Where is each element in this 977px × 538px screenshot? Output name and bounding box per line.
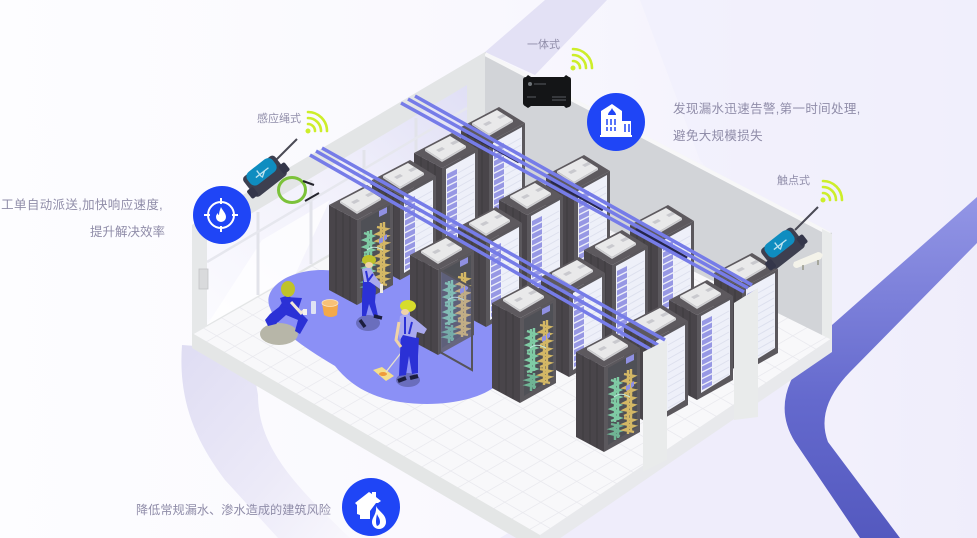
sensor: rope type	[238, 139, 319, 202]
green sensing rope	[278, 178, 319, 202]
icon: building with flame	[587, 93, 645, 151]
sensor: contact type	[756, 207, 823, 273]
background band: right blue	[785, 197, 977, 538]
right wall	[485, 52, 832, 345]
label: contact type: 触点式	[777, 173, 810, 187]
background facet: upper right	[640, 0, 977, 325]
worker: standing	[356, 255, 383, 331]
floor edge: front left	[192, 333, 540, 538]
text: dispatch: 工单自动派送,加快响应速度,	[1, 197, 163, 212]
left glass wall	[192, 52, 485, 338]
text: alert line 2: 避免大规模损失	[673, 128, 763, 143]
bottle	[311, 301, 316, 314]
background band: lower left	[181, 345, 350, 538]
open rack door	[440, 270, 472, 370]
background facet: lower right	[500, 370, 860, 538]
bucket	[322, 300, 338, 317]
water puddle	[268, 270, 510, 404]
background band: top	[485, 0, 607, 75]
label: rope type: 感应绳式	[257, 111, 301, 125]
front pillars	[643, 288, 758, 472]
icon: house with flame	[342, 478, 400, 536]
device: integrated	[523, 75, 571, 108]
wifi: contact type	[821, 181, 842, 202]
label: integrated: 一体式	[527, 37, 560, 51]
wall switch	[199, 269, 208, 289]
wifi: integrated	[571, 49, 592, 70]
text: risk: 降低常规漏水、渗水造成的建筑风险	[136, 502, 331, 517]
server racks	[329, 107, 778, 452]
worker: mopping	[373, 300, 427, 387]
overhead cable trays: front	[310, 148, 665, 349]
text: dispatch line 2: 提升解决效率	[90, 224, 165, 239]
tiled floor	[192, 168, 832, 538]
worker: kneeling	[260, 281, 308, 345]
icon: target with flame	[193, 186, 251, 244]
overhead cable trays: back	[401, 96, 752, 292]
wifi: rope type	[306, 112, 327, 133]
white contact sensor	[793, 252, 823, 270]
room	[192, 52, 832, 538]
text: alert: 发现漏水迅速告警,第一时间处理,	[673, 101, 861, 116]
floor edge: front right	[540, 338, 832, 538]
